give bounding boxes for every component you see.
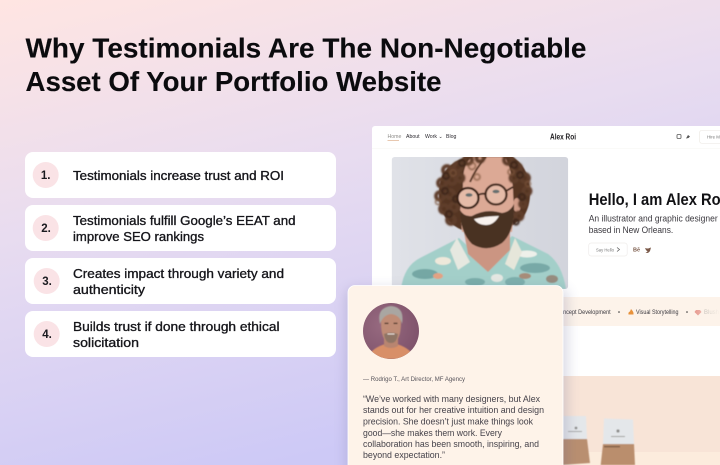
list item 1: 1.	[41, 170, 50, 182]
skills ticker strip	[564, 297, 720, 326]
list item 4: solicitation	[73, 335, 139, 350]
skills ticker strip: Blush	[704, 310, 719, 316]
list item 4: Builds trust if done through ethical	[73, 319, 280, 334]
list item 2	[25, 205, 336, 251]
list item 3: authenticity	[73, 282, 145, 297]
testimonial quote: stands out for her creative intuition and design	[363, 404, 544, 415]
skills ticker strip: Concept Development	[556, 310, 611, 316]
title	[26, 32, 586, 97]
testimonial attribution: — Rodrigo T., Art Director, MF Agency	[363, 376, 466, 383]
testimonial quote: precision. She doesn’t just make things look	[363, 416, 533, 426]
testimonial card	[346, 286, 568, 465]
hair curls	[436, 154, 530, 224]
panel: key points list	[25, 152, 336, 357]
list item 3: 3.	[42, 276, 52, 288]
list item 3	[25, 258, 336, 304]
shirt	[401, 236, 566, 289]
navigation bar: Work ⌄	[425, 134, 443, 140]
testimonial quote: “We’ve worked with many designers, but Alex	[363, 393, 540, 404]
testimonial quote: beyond expectation.”	[363, 449, 445, 460]
testimonial quote	[363, 393, 544, 460]
title: Why Testimonials Are The Non-Negotiable	[26, 32, 586, 64]
bag right	[603, 418, 634, 444]
list item 4	[25, 311, 336, 357]
hero text	[588, 193, 720, 233]
list item 4: 4.	[42, 329, 52, 341]
neck	[464, 232, 510, 272]
face	[460, 157, 514, 232]
navigation bar	[372, 130, 720, 148]
beard	[460, 204, 514, 248]
testimonial quote: collaboration has been smooth, inspiring, and	[363, 438, 539, 449]
avatar: older man with grey hair	[363, 303, 419, 359]
photo: smiling man with curly hair and glasses	[392, 154, 568, 289]
hair back	[439, 155, 530, 230]
bag left	[560, 416, 587, 439]
list item 2: 2.	[41, 223, 51, 235]
glasses	[458, 188, 478, 208]
say hello button and social links: Bē	[633, 248, 640, 254]
hero text: based in New Orleans.	[589, 224, 673, 235]
testimonial quote: good—she makes them work. Every	[363, 427, 502, 438]
navigation bar: Blog	[446, 134, 456, 140]
product photo with packaging bags	[563, 376, 720, 465]
navigation bar: Home	[388, 134, 401, 140]
panel: portfolio website mockup	[372, 126, 720, 465]
navigation bar: About	[406, 134, 420, 140]
title: Asset Of Your Portfolio Website	[26, 66, 441, 97]
list item 1: Testimonials increase trust and ROI	[73, 168, 284, 183]
say hello button and social links	[589, 243, 651, 256]
navigation bar: Alex Roi	[550, 132, 576, 142]
list item 2: improve SEO rankings	[73, 229, 204, 244]
say hello button and social links: Say Hello	[596, 248, 615, 252]
list item 2: Testimonials fulfill Google’s EEAT and	[73, 213, 296, 228]
list item 3: Creates impact through variety and	[73, 266, 284, 281]
skills ticker strip: Visual Storytelling	[636, 310, 678, 316]
list item 1	[25, 152, 336, 198]
